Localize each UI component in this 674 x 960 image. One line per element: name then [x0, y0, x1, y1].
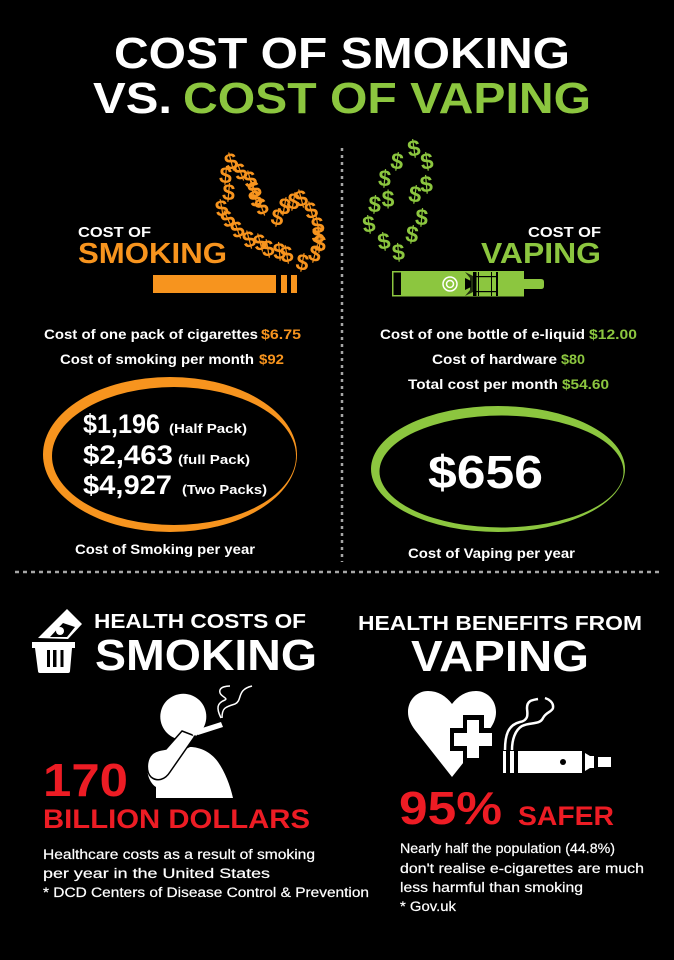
statistic: 95% safer — [399, 782, 614, 834]
icon: dollar smoke orange: $ — [239, 225, 259, 253]
text block: smoking costs — [44, 327, 302, 367]
heading: cost of smoking — [78, 224, 227, 270]
icon: dollar smoke orange: $ — [216, 204, 239, 233]
icon: dollar smoke green: $ — [414, 204, 429, 231]
icon: dollar smoke green — [361, 134, 435, 266]
icon: dollar smoke orange: $ — [306, 239, 325, 268]
icon: dollar smoke orange: $ — [244, 175, 265, 204]
icon: dollar smoke orange: $ — [301, 196, 321, 224]
callout: vaping yearly cost: $656 — [428, 446, 543, 498]
text block: vaping benefits: * Gov.uk — [400, 899, 456, 914]
panel: cost of smoking — [43, 147, 327, 557]
heading: health costs of smoking: HEALTH COSTS OF — [94, 610, 306, 633]
icon: dollar smoke orange: $ — [312, 222, 325, 248]
text block: healthcare costs: per year in the United States — [43, 866, 270, 881]
icon: money in bin — [32, 609, 82, 673]
icon: heart with cross — [408, 691, 497, 777]
heading: health costs of smoking: SMOKING — [95, 631, 317, 680]
icon: dollar smoke green: $ — [377, 165, 392, 192]
heading: cost of vaping — [481, 224, 601, 270]
statistic: 95% safer: 95% — [399, 782, 502, 834]
text block: smoking costs: Cost of smoking per month — [60, 352, 254, 367]
heading: cost of smoking: COST OF — [78, 224, 151, 241]
icon: dollar smoke orange: $ — [245, 184, 266, 213]
title: VS. — [93, 74, 172, 123]
icon: vape and cigarette smoke — [503, 698, 611, 773]
text block: healthcare costs: * DCD Centers of Disease Control & Prevention — [43, 885, 369, 900]
icon: dollar smoke orange: $ — [276, 192, 293, 220]
icon: dollar smoke orange: $ — [269, 203, 286, 231]
heading: health costs of smoking — [94, 610, 317, 680]
icon: dollar smoke green: $ — [361, 210, 377, 238]
text block: smoking costs: $92 — [259, 352, 284, 367]
callout: smoking yearly cost: (Half Pack) — [169, 421, 247, 436]
icon: dollar smoke orange: $ — [272, 238, 287, 265]
text block: healthcare costs — [43, 847, 369, 900]
icon: dollar smoke green: $ — [404, 220, 420, 248]
caption: smoking per year: Cost of Smoking per year — [75, 542, 256, 557]
panel: health benefits from vaping — [358, 612, 644, 914]
icon: dollar smoke orange: $ — [259, 234, 276, 262]
text block: vaping costs: Cost of hardware — [432, 352, 558, 367]
text block: vaping costs: Total cost per month — [408, 377, 558, 392]
panel: cost of vaping — [361, 134, 637, 561]
icon: dollar smoke orange: $ — [213, 194, 230, 222]
icon: dollar smoke orange: $ — [230, 157, 251, 186]
heading: health benefits from vaping — [358, 612, 642, 681]
statistic: 170 billion dollars: BILLION DOLLARS — [43, 804, 310, 834]
statistic: 170 billion dollars — [43, 754, 310, 834]
icon: dollar smoke green: $ — [419, 147, 435, 175]
icon: dollar smoke orange: $ — [221, 147, 241, 175]
icon: dollar smoke green: $ — [406, 134, 422, 162]
icon: dollar smoke green: $ — [391, 239, 406, 266]
callout: smoking yearly cost: $1,196 — [83, 409, 160, 439]
text block: vaping costs: $12.00 — [589, 327, 637, 342]
title: COST OF VAPING — [183, 74, 591, 123]
text block: vaping costs: Cost of one bottle of e-liquid — [380, 327, 585, 342]
icon: dollar smoke orange: $ — [251, 192, 272, 221]
icon: dollar smoke orange: $ — [291, 184, 311, 212]
text block: healthcare costs: Healthcare costs as a result of smoking — [43, 847, 315, 862]
icon: dollar smoke orange: $ — [312, 230, 327, 257]
text block: vaping benefits: Nearly half the population (44.8%) — [400, 841, 615, 856]
icon: dollar smoke green: $ — [376, 227, 392, 255]
icon: dollar smoke green: $ — [367, 191, 382, 218]
icon: dollar smoke green: $ — [382, 186, 395, 212]
caption: vaping per year: Cost of Vaping per year — [408, 546, 576, 561]
icon: dollar smoke orange: $ — [285, 187, 302, 215]
text block: vaping costs: $80 — [561, 352, 585, 367]
heading: cost of smoking: SMOKING — [78, 238, 227, 270]
icon: dollar smoke orange: $ — [250, 228, 270, 256]
text block: vaping benefits — [400, 841, 644, 914]
text block: vaping benefits: don't realise e-cigarettes are much — [400, 861, 644, 876]
callout: smoking yearly cost: (full Pack) — [178, 452, 250, 467]
text block: vaping costs: $54.60 — [562, 377, 609, 392]
icon: dollar smoke orange: $ — [218, 162, 233, 189]
icon: dollar smoke orange: $ — [294, 248, 311, 276]
callout: smoking yearly cost: (Two Packs) — [182, 482, 267, 497]
heading: cost of vaping: COST OF — [528, 224, 601, 241]
callout: smoking yearly cost — [43, 377, 297, 532]
icon: dollar smoke orange: $ — [278, 240, 295, 268]
heading: health benefits from vaping: HEALTH BENEFITS FROM — [358, 612, 642, 635]
heading: health benefits from vaping: VAPING — [411, 632, 589, 681]
icon: dollar smoke orange: $ — [240, 165, 260, 193]
statistic: 95% safer: SAFER — [518, 801, 614, 831]
icon: cigarette — [153, 275, 297, 293]
text block: vaping costs — [380, 327, 637, 392]
callout: vaping yearly cost — [371, 406, 625, 532]
icon: person smoking — [147, 686, 252, 798]
icon: dollar smoke green: $ — [389, 147, 405, 175]
title: COST OF SMOKING — [114, 29, 570, 78]
text block: vaping benefits: less harmful than smoking — [400, 880, 583, 895]
icon: vape pen — [392, 271, 544, 296]
icon: dollar smoke orange: $ — [221, 179, 236, 206]
statistic: 170 billion dollars: 170 — [43, 754, 128, 806]
heading: cost of vaping: VAPING — [481, 238, 601, 270]
callout: smoking yearly cost: $4,927 — [83, 470, 172, 500]
callout: smoking yearly cost: $2,463 — [83, 440, 173, 470]
icon: dollar smoke orange: $ — [227, 215, 248, 244]
icon: dollar smoke orange: $ — [309, 211, 326, 239]
panel: health costs of smoking — [32, 609, 369, 900]
icon: dollar smoke green: $ — [407, 180, 423, 208]
title — [93, 29, 591, 123]
icon: dollar smoke orange — [213, 147, 327, 276]
icon: dollar smoke green: $ — [419, 171, 434, 198]
text block: smoking costs: $6.75 — [261, 327, 302, 342]
text block: smoking costs: Cost of one pack of cigarettes — [44, 327, 258, 342]
